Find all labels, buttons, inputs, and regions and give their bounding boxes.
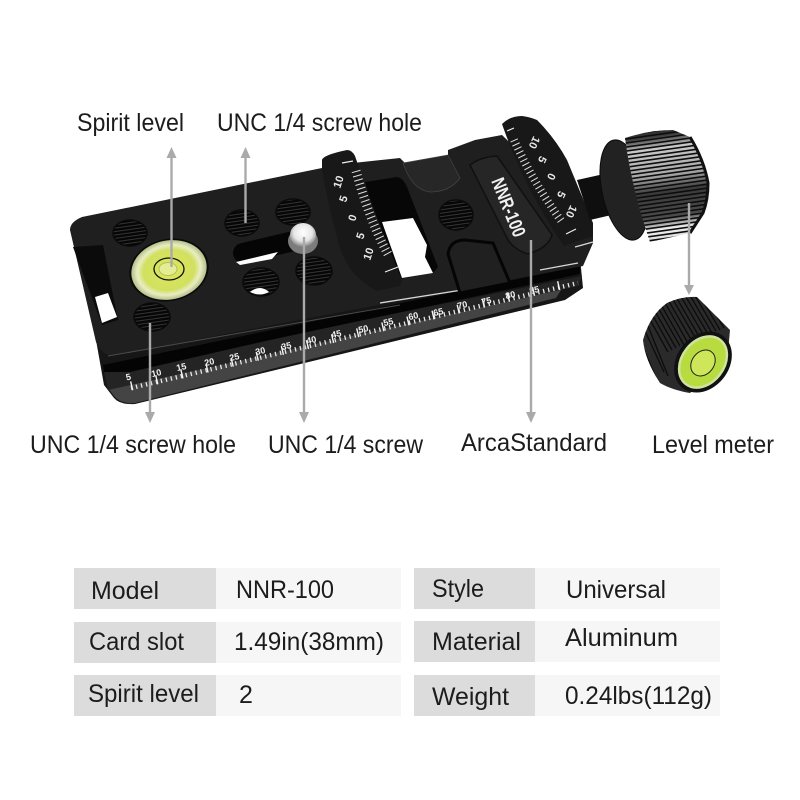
right body notch [403, 155, 460, 192]
right jaw ticks [514, 140, 562, 222]
spec table [74, 568, 720, 716]
knurled knob [625, 130, 706, 242]
row: style: Style [432, 575, 484, 603]
textured rail strip [108, 284, 565, 403]
arrow: upper screw hole [240, 147, 250, 223]
row: weight: Weight [432, 683, 509, 711]
row: style: Universal [566, 576, 666, 604]
arrow: screw [299, 237, 309, 423]
label: arca standard: ArcaStandard [461, 429, 607, 457]
row: card slot: 1.49in(38mm) [234, 628, 384, 656]
rail scale numbers: 60 [407, 310, 419, 322]
rail scale numbers: 80 [504, 289, 516, 301]
arrow: arca standard [526, 240, 536, 423]
window: white opening [382, 218, 433, 278]
groove [103, 266, 580, 372]
rail side and lower strip [96, 258, 583, 404]
left jaw numbers: 5 [354, 231, 368, 241]
rail scale numbers: 55 [382, 316, 394, 328]
knob flange [592, 136, 656, 244]
knob end rim [690, 137, 708, 233]
arrow: lower screw hole [145, 323, 155, 423]
rail scale numbers: 50 [357, 323, 369, 335]
right jaw numbers: 0 [544, 171, 557, 182]
rail scale numbers: 15 [175, 361, 187, 373]
body threaded hole [439, 200, 473, 230]
rail scale numbers: 25 [228, 351, 240, 363]
slot [243, 240, 298, 253]
row: spirit level: 2 [239, 681, 253, 709]
chrome screw [288, 223, 318, 254]
slot opening [236, 252, 278, 265]
row: card slot [74, 622, 401, 663]
rail scale numbers: 85 [528, 284, 540, 296]
knob neck [577, 172, 620, 220]
row: card slot: Card slot [89, 628, 184, 656]
row: weight: 0.24lbs(112g) [565, 682, 712, 710]
row: spirit level [74, 675, 401, 716]
rail scale band [104, 276, 582, 390]
rail scale numbers: 70 [456, 299, 468, 311]
left jaw long ticks [342, 161, 398, 272]
spirit level bubble [123, 231, 215, 309]
model engraving: NNR-100 [486, 175, 529, 240]
arrow: spirit level [166, 147, 176, 267]
plate top face [70, 135, 593, 356]
rail scale numbers: 5 [125, 372, 132, 383]
row: material [414, 621, 720, 662]
right jaw numbers [526, 134, 579, 219]
threaded holes [113, 199, 332, 331]
left jaw [322, 150, 402, 291]
right jaw [502, 116, 593, 246]
row: style [414, 568, 720, 609]
left jaw numbers: 10 [332, 174, 347, 190]
screw-hole light spot [250, 288, 269, 294]
raised label plate [470, 156, 552, 254]
window: dark part of clamp [365, 177, 438, 280]
right jaw numbers: 5 [554, 189, 567, 200]
left notch opening [95, 293, 117, 323]
left jaw numbers: 10 [362, 246, 377, 262]
row: model [74, 568, 401, 609]
right jaw numbers: 10 [526, 134, 542, 150]
label: level meter: Level meter [652, 431, 774, 459]
left jaw ticks [356, 171, 389, 256]
rail scale ticks [131, 281, 578, 388]
label: spirit level: Spirit level [77, 109, 184, 137]
row: model: Model [91, 577, 159, 605]
row: material: Aluminum [565, 624, 678, 652]
right jaw long ticks [507, 128, 576, 234]
rail scale numbers: 10 [150, 367, 162, 379]
row: material: Material [432, 628, 521, 656]
rail scale numbers: 35 [280, 340, 292, 352]
left notch [73, 245, 118, 325]
detached level knob [643, 296, 732, 393]
label: screw: UNC 1/4 screw [268, 431, 424, 459]
right jaw numbers: 10 [563, 203, 579, 219]
product: NNR-100 clamp [70, 116, 744, 404]
row: spirit level: Spirit level [88, 680, 199, 708]
plate front highlight [108, 305, 400, 356]
rail scale numbers [125, 284, 540, 383]
label: upper screw hole: UNC 1/4 screw hole [217, 109, 422, 137]
rail scale numbers: 45 [330, 328, 342, 340]
left jaw numbers: 0 [346, 213, 360, 223]
left jaw numbers: 5 [337, 194, 351, 204]
rail scale numbers: 75 [480, 295, 492, 307]
rail scale numbers: 65 [432, 306, 444, 318]
rail scale numbers: 30 [254, 345, 266, 357]
row: model: NNR-100 [236, 576, 334, 604]
body edge highlights [380, 242, 593, 303]
rail scale numbers: 20 [203, 356, 215, 368]
arrow: level meter [684, 203, 694, 295]
row: weight [414, 675, 720, 716]
U slot [448, 240, 510, 293]
left jaw numbers [332, 174, 377, 262]
label: lower screw hole: UNC 1/4 screw hole [30, 431, 236, 459]
rail scale numbers: 40 [305, 334, 317, 346]
right jaw numbers: 5 [535, 154, 548, 165]
